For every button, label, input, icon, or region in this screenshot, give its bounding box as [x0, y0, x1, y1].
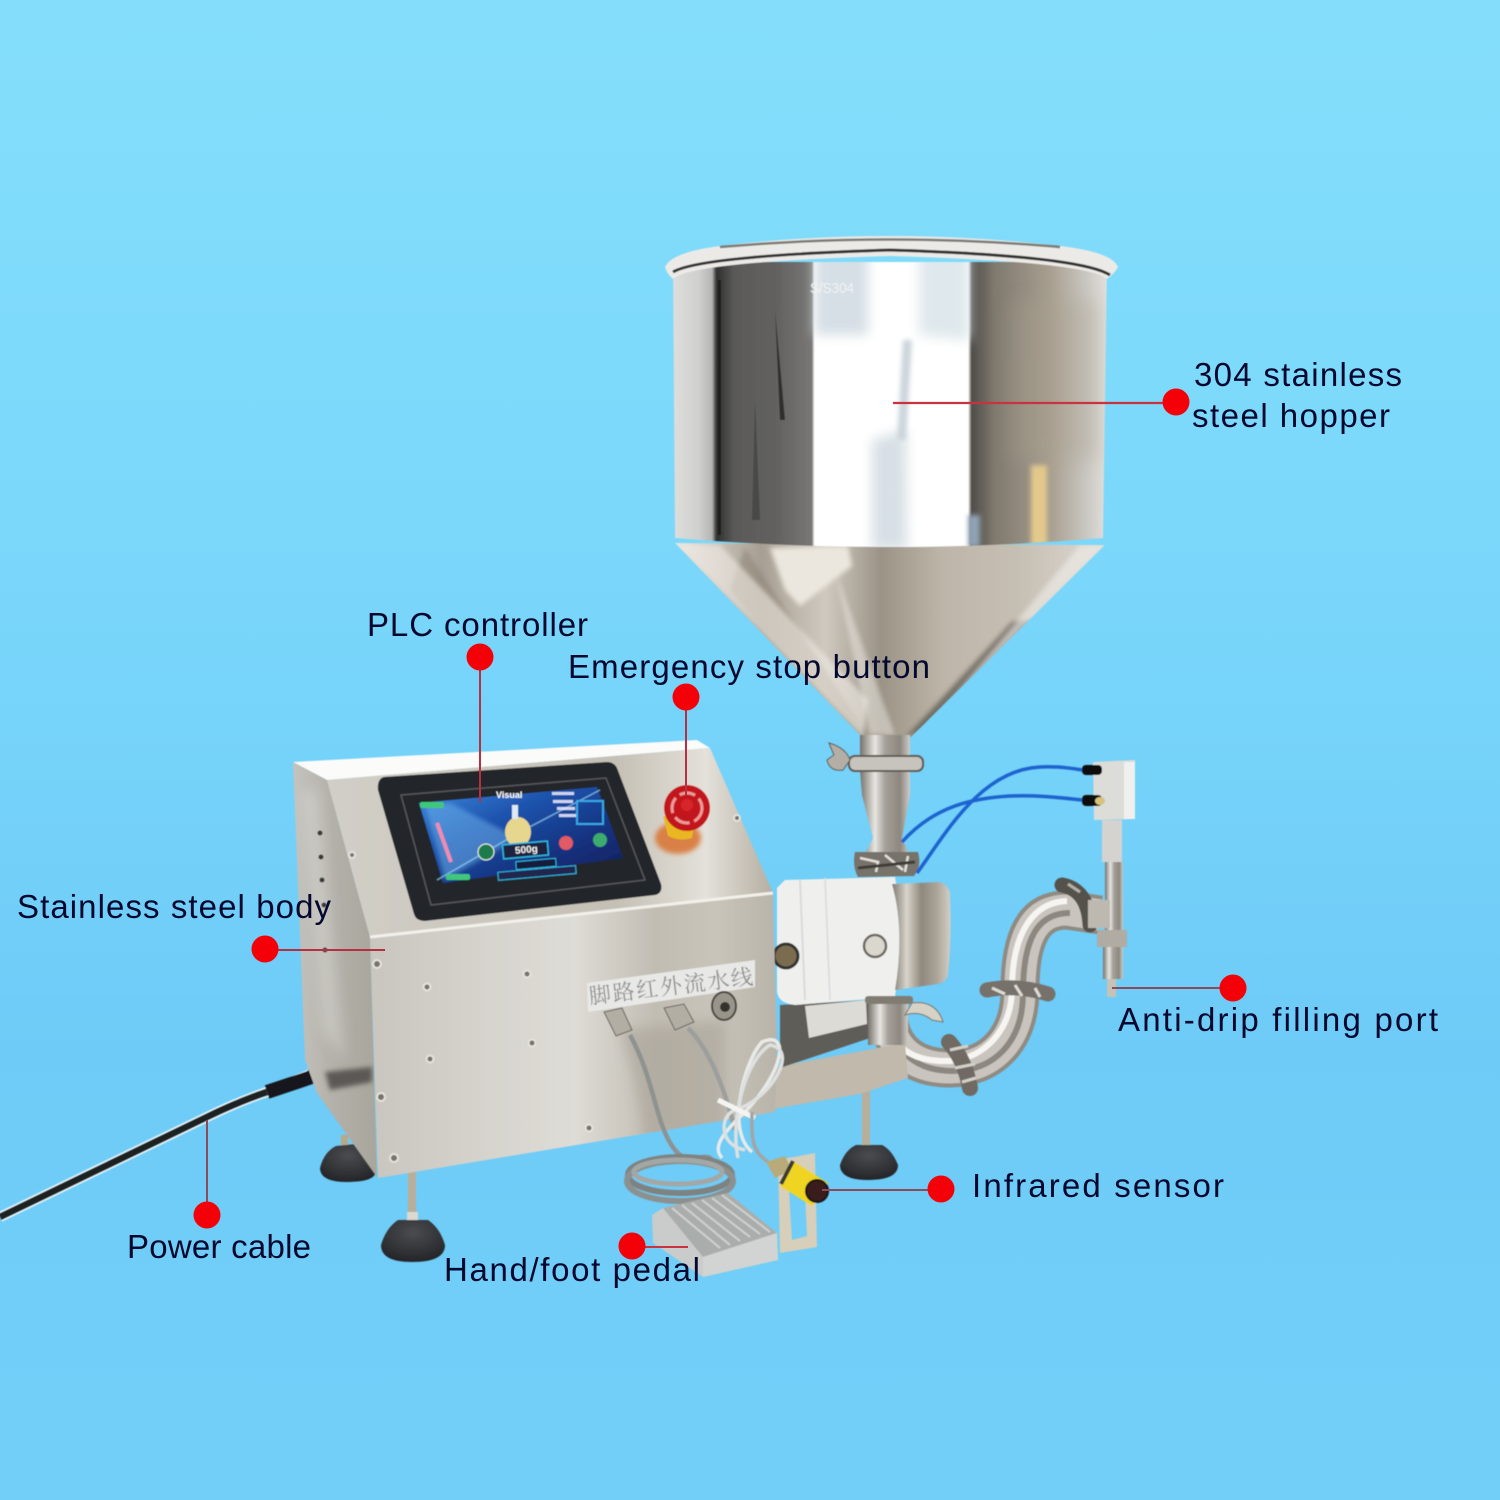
callout: Stainless steel body: Stainless steel body — [17, 888, 332, 925]
callout: Hand/foot pedal — [444, 1232, 700, 1288]
pipe clamp: lower — [949, 1042, 970, 1088]
callout: Emergency stop button: Emergency stop button — [568, 648, 930, 685]
hopper — [665, 236, 1118, 738]
hopper cone — [675, 543, 1105, 738]
callout: Infrared sensor: Infrared sensor — [972, 1167, 1224, 1204]
pipe clamp: upper — [1062, 885, 1090, 925]
outlet pipe — [888, 884, 1110, 1088]
callout: Anti-drip filling port: Anti-drip filling port — [1118, 1001, 1438, 1038]
pipe clamp: middle — [987, 988, 1048, 994]
bezel — [378, 762, 661, 921]
callout: Stainless steel body — [17, 888, 385, 962]
cable coil — [627, 1157, 733, 1201]
callout: Infrared sensor — [822, 1167, 1224, 1204]
callout: Emergency stop button — [568, 648, 930, 795]
port label strip: 脚路红外流水线 — [588, 964, 754, 1009]
callout: Anti-drip filling port — [1112, 974, 1438, 1038]
hopper rim — [665, 236, 1118, 279]
callout: PLC controller — [367, 606, 588, 802]
machine housing — [293, 740, 777, 1178]
callout: Power cable: Power cable — [127, 1228, 311, 1265]
touch screen: 500g — [515, 844, 538, 857]
hopper cylinder — [673, 250, 1107, 556]
pump white housing — [777, 877, 900, 1005]
hopper neck and clamps — [827, 735, 923, 877]
sensor bracket — [778, 1153, 817, 1253]
front panel — [370, 893, 777, 1178]
emergency stop button — [655, 785, 710, 854]
callout: 304 stainless steel hopper: 304 stainless — [1194, 356, 1402, 393]
display — [419, 787, 623, 883]
callout: PLC controller: PLC controller — [367, 606, 588, 643]
slanted control panel — [327, 748, 773, 937]
side panel — [293, 762, 377, 1177]
top strip — [293, 740, 710, 780]
hopper mark: S/S304 — [810, 280, 854, 297]
panel connectors — [604, 992, 736, 1036]
foot: rear left — [320, 1135, 376, 1182]
foot: right — [840, 1090, 898, 1180]
pump — [720, 877, 951, 1118]
air hoses — [902, 767, 1082, 873]
sensor and pedal cables — [630, 1028, 782, 1162]
callout: Hand/foot pedal: Hand/foot pedal — [444, 1251, 700, 1288]
callout: Power cable — [127, 1120, 311, 1265]
foot: front left — [381, 1172, 445, 1262]
callout: 304 stainless steel hopper — [893, 356, 1402, 434]
touch screen: Visual — [496, 790, 522, 800]
power cable — [0, 1068, 327, 1217]
pump steel cap — [892, 882, 951, 990]
foot pedal — [652, 1193, 778, 1277]
pump base block — [720, 1043, 908, 1118]
touch screen — [378, 762, 661, 921]
filling head — [1082, 760, 1135, 997]
callout: 304 stainless steel hopper: steel hopper — [1192, 397, 1390, 434]
infrared sensor — [766, 1156, 828, 1206]
filling machine — [0, 236, 1135, 1277]
